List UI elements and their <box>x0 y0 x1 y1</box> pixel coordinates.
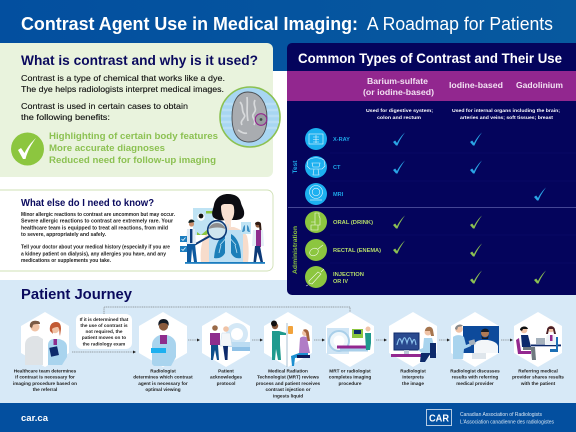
column header band: (or iodine-based) <box>363 87 434 97</box>
caption 4: process and patient receives <box>256 381 321 386</box>
caption 6: the image <box>402 381 424 386</box>
body text: medications or supplements you take. <box>21 258 112 264</box>
row: oral: ORAL (DRINK) <box>333 220 373 226</box>
panel: what is contrast <box>0 43 280 177</box>
caption 4: contrast injection or <box>265 387 311 392</box>
step 7: radiologist discusses results <box>451 312 499 367</box>
step 4: MRT reviews process <box>264 312 312 367</box>
callout: contrast not required <box>76 314 132 349</box>
heading: what else: What else do I need to know? <box>21 198 154 209</box>
callout: contrast not required: the use of contrast is <box>80 323 128 328</box>
side label: test: Test <box>292 160 299 173</box>
caption 4: Medical Radiation <box>268 368 308 374</box>
step 5: imaging procedure <box>326 312 374 367</box>
caption 8 <box>512 368 564 386</box>
caption 5: procedure <box>339 381 362 386</box>
arrow 1 to 2 <box>72 350 136 354</box>
association name: L'Association canadienne des radiologistes <box>460 420 554 426</box>
illustration: MRI scanner <box>327 326 371 354</box>
column descriptions: Used for internal organs including the brain; <box>452 108 560 114</box>
icon: injection <box>305 266 327 288</box>
column descriptions: colon and rectum <box>377 115 421 121</box>
body text <box>21 212 176 264</box>
icon: x-ray <box>305 128 327 150</box>
heading: what is contrast: What is contrast and why is it used? <box>21 53 258 68</box>
benefits list: Highlighting of certain body features <box>49 131 218 141</box>
title: Contrast Agent Use in Medical Imaging: <box>21 14 358 34</box>
intro text: The dye helps radiologists interpret medical images. <box>21 85 224 94</box>
caption 2: determines which contrast <box>133 374 193 380</box>
caption 6: interprets <box>402 374 424 380</box>
intro text: the following benefits: <box>21 113 110 122</box>
step 2: radiologist determines <box>139 312 187 367</box>
icon: brain scan <box>220 87 280 147</box>
caption 6: Radiologist <box>400 368 426 374</box>
illustration: radiologist with tablet <box>151 319 176 366</box>
arrow 7 to 8 <box>501 338 513 342</box>
intro text: Contrast is used in certain cases to obtain <box>21 102 188 111</box>
callout: contrast not required: not required, the <box>86 329 123 334</box>
caption 7: Radiologist discusses <box>450 368 500 374</box>
arrow: bypass to imaging <box>104 307 352 321</box>
icon: ct <box>305 156 327 178</box>
illustration: radiologist at workstation <box>391 327 436 362</box>
column descriptions: arteries and veins; soft tissues; breast <box>460 115 553 121</box>
arrow 6 to 7 <box>439 338 450 342</box>
row: x-ray <box>305 128 482 150</box>
caption 7 <box>450 368 500 386</box>
row: injection <box>305 266 546 288</box>
association name: Canadian Association of Radiologists <box>460 412 542 418</box>
caption 7: medical provider <box>456 381 494 386</box>
illustration: patient and technologist at scanner <box>210 323 250 360</box>
caption 3 <box>210 368 242 386</box>
icon: oral drink <box>305 211 327 233</box>
caption 8: provider shares results <box>512 374 564 380</box>
step 1: healthcare team <box>21 312 69 367</box>
table title: Common Types of Contrast and Their Use <box>298 51 562 66</box>
panel: common types of contrast table <box>287 43 576 295</box>
callout: contrast not required: If it is determined that <box>80 317 129 322</box>
caption 5 <box>329 368 371 386</box>
caption 2 <box>133 368 193 392</box>
callout: contrast not required: the radiology exam <box>83 342 125 346</box>
caption 1: if contrast is necessary for <box>15 374 75 380</box>
row: injection: OR IV <box>333 279 348 285</box>
caption 1: Healthcare team determines <box>14 368 77 374</box>
caption 4 <box>256 368 321 398</box>
illustration: doctors <box>25 321 67 365</box>
icon: rectal enema <box>305 239 327 261</box>
body text: a kidney patient on dialysis), any allergies you have, and any <box>21 251 166 257</box>
body text: Tell your doctor about your medical history (especially if you are <box>21 245 170 251</box>
benefits list <box>49 131 218 165</box>
caption 4: Technologist (MRT) reviews <box>257 374 319 380</box>
caption 1 <box>13 368 77 392</box>
intro text <box>21 74 225 122</box>
icon: large check <box>11 132 44 166</box>
caption 4: ingests liquid <box>273 394 303 398</box>
side label: administration: Administration <box>292 226 299 274</box>
column descriptions <box>366 108 560 121</box>
body text: healthcare team is equipped to treat all reactions, from mild <box>21 225 168 231</box>
step 3: patient acknowledges <box>202 312 250 367</box>
icon: mri <box>305 183 327 205</box>
title: A Roadmap for Patients <box>363 14 553 34</box>
footer band <box>0 403 576 432</box>
caption 5: completes imaging <box>329 374 371 380</box>
caption 2: Radiologist <box>150 368 176 374</box>
column descriptions: Used for digestive system; <box>366 108 433 114</box>
row: ct: CT <box>333 165 341 171</box>
column header band: Iodine-based <box>449 80 503 90</box>
row: mri: MRI <box>333 192 344 198</box>
arrow 4 to 5 <box>314 338 325 342</box>
row: injection: INJECTION <box>333 272 364 278</box>
arrow 5 to 6 <box>376 338 387 342</box>
association name <box>460 412 554 426</box>
callout: contrast not required: patient moves on to <box>82 335 126 340</box>
caption 8: Referring medical <box>518 368 558 374</box>
column header band: Barium-sulfate <box>367 76 428 86</box>
arrow 2 to 3 <box>188 338 200 342</box>
caption 3: protocol <box>217 381 235 386</box>
caption 7: results with referring <box>452 374 498 380</box>
row divider <box>288 206 576 208</box>
row: x-ray: X-RAY <box>333 137 350 143</box>
illustration: consultation <box>516 326 561 360</box>
column header band <box>287 71 576 101</box>
step 8: provider shares results <box>514 312 562 367</box>
panel: what else do I need to know <box>0 190 273 271</box>
illustration: lungs examination <box>180 194 265 264</box>
logo: CAR: CAR <box>429 414 450 424</box>
benefits list: Reduced need for follow-up imaging <box>49 155 216 165</box>
caption 1: imaging procedure based on <box>13 381 77 386</box>
intro text: Contrast is a type of chemical that works like a dye. <box>21 74 225 83</box>
row: rectal: RECTAL (ENEMA) <box>333 248 381 254</box>
panel: patient journey <box>0 280 576 403</box>
header band <box>0 0 576 71</box>
body text: Severe allergic reactions to contrast are extremely rare. Your <box>21 219 173 225</box>
heading: patient journey: Patient Journey <box>21 287 132 303</box>
benefits list: More accurate diagnoses <box>49 143 165 153</box>
caption 2: agent is necessary for <box>138 381 188 386</box>
step 6: radiologist interprets <box>389 312 437 367</box>
body text: to severe, appropriately and safely. <box>21 232 107 238</box>
logo: CAR <box>426 410 452 426</box>
arrow 3 to 4 <box>252 338 263 342</box>
row: mri <box>305 183 546 205</box>
caption 5: MRT or radiologist <box>329 368 371 374</box>
caption 3: acknowledges <box>210 374 242 380</box>
caption 3: Patient <box>218 368 234 374</box>
illustration: video call <box>453 325 499 359</box>
column header band: Gadolinium <box>516 80 563 90</box>
row: rectal <box>305 239 482 261</box>
caption 1: the referral <box>33 387 57 392</box>
illustration: nurse and patient <box>271 320 310 367</box>
website: car.ca <box>21 413 49 423</box>
caption 6 <box>400 368 426 386</box>
row: ct <box>305 156 482 178</box>
body text: Minor allergic reactions to contrast are uncommon but may occur. <box>21 212 176 218</box>
caption 8: with the patient <box>520 381 556 386</box>
caption 2: optimal viewing <box>145 387 181 392</box>
row: oral <box>305 211 482 233</box>
